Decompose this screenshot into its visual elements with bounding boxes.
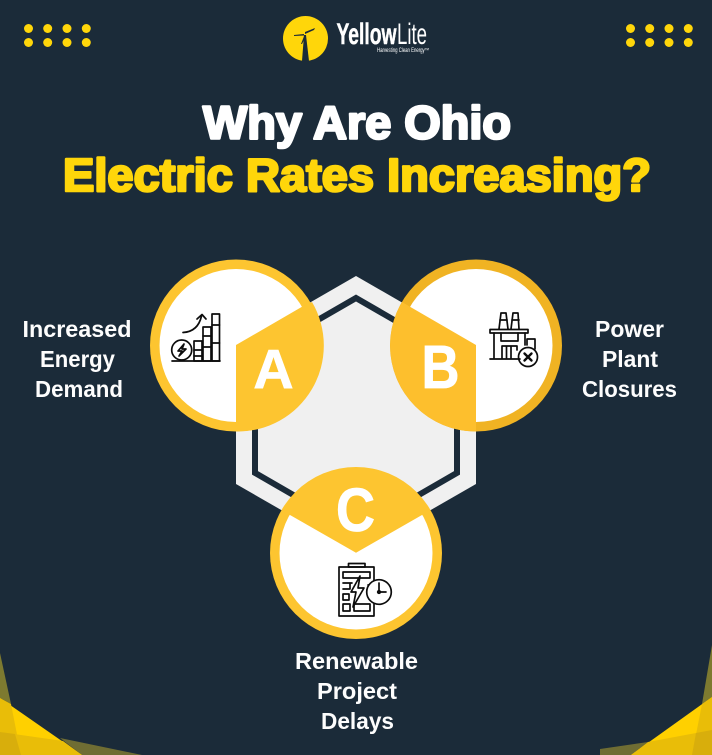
icon: power plant closure bbox=[490, 313, 538, 366]
label: Increased Energy Demand bbox=[22, 316, 132, 402]
decorative corner: bottom left bbox=[0, 653, 142, 755]
label: Renewable Project Delays bbox=[295, 648, 418, 734]
label: Power Plant Closures: Closures bbox=[582, 376, 677, 402]
title: Electric Rates Increasing? bbox=[63, 149, 651, 201]
circle B bbox=[390, 260, 562, 432]
label: Increased Energy Demand: Demand bbox=[35, 376, 123, 402]
label: Renewable Project Delays: Delays bbox=[321, 708, 394, 734]
label: Power Plant Closures bbox=[582, 316, 677, 402]
logo: YellowLite: Harvesting Clean Energy™ bbox=[377, 47, 429, 54]
letter C: C bbox=[336, 476, 375, 544]
label: Increased Energy Demand: Increased bbox=[22, 316, 132, 342]
decorative corner: bottom right bbox=[600, 645, 712, 755]
logo: YellowLite bbox=[283, 16, 429, 61]
label: Renewable Project Delays: Project bbox=[317, 678, 397, 704]
letter B: B bbox=[422, 333, 460, 401]
dots: top right bbox=[626, 24, 693, 47]
title: Why Are Ohio bbox=[203, 96, 511, 148]
title bbox=[63, 96, 651, 201]
icon: delayed battery project bbox=[339, 564, 391, 616]
label: Renewable Project Delays: Renewable bbox=[295, 648, 418, 674]
letter A: A bbox=[253, 338, 294, 400]
icon: energy demand chart bbox=[172, 314, 220, 361]
logo: YellowLite: Lite bbox=[397, 18, 427, 51]
logo: YellowLite: Yellow bbox=[336, 18, 397, 51]
central hexagon bbox=[236, 276, 476, 553]
circle A bbox=[150, 260, 324, 432]
dots: top left bbox=[24, 24, 91, 47]
label: Power Plant Closures: Plant bbox=[602, 346, 658, 372]
circle C bbox=[270, 467, 442, 639]
label: Power Plant Closures: Power bbox=[595, 316, 664, 342]
label: Increased Energy Demand: Energy bbox=[40, 346, 115, 372]
